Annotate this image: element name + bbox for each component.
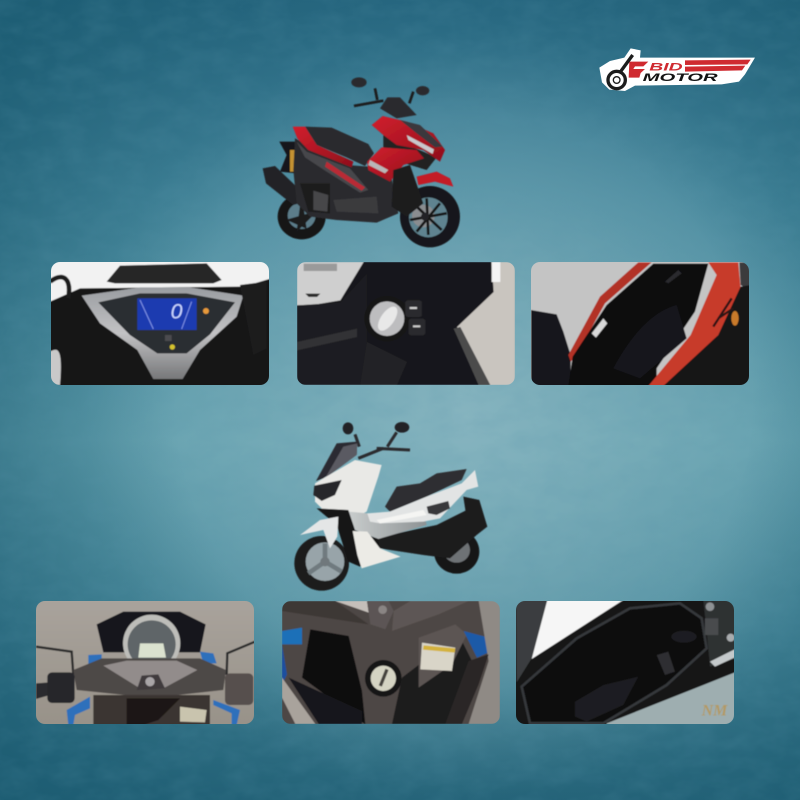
rear shock [279, 142, 303, 173]
photo: red scooter key ignition [297, 262, 515, 385]
logo sticker outline [599, 48, 755, 91]
red tail [293, 127, 353, 167]
seat [385, 469, 467, 512]
photo: white scooter handlebar dash [35, 600, 257, 725]
silver mid panel [348, 512, 427, 539]
front fender [417, 172, 453, 187]
rear wheel [434, 530, 479, 574]
headlight [313, 480, 342, 501]
photo: white scooter ignition and pocket [282, 601, 500, 724]
engine and dark lower body [373, 508, 487, 558]
scooter: red sport model [263, 77, 460, 247]
front wheel [400, 186, 460, 247]
white body side [367, 470, 478, 523]
red leg shield [367, 147, 424, 182]
front fork [392, 165, 423, 217]
scooter: white maxi model [294, 422, 487, 591]
photo: white scooter under-seat storage: NM [701, 703, 728, 720]
rear wheel [278, 194, 326, 239]
fork and dark center [317, 508, 380, 567]
photo: red scooter instrument panel: 0 [171, 299, 183, 323]
photo: red scooter instrument panel [50, 261, 272, 386]
white front fairing [315, 460, 382, 518]
handlebar and mirrors [351, 77, 429, 106]
front fender [300, 517, 338, 548]
logo: Bid Motor [599, 48, 755, 91]
dark body silhouette [293, 138, 398, 223]
logo red stripes [629, 60, 751, 78]
photo: red scooter under-seat storage [530, 261, 752, 386]
front wheel [294, 536, 349, 591]
front fairing [372, 116, 445, 162]
fairing dark stripes [400, 120, 443, 147]
mirrors and handlebar [343, 422, 410, 458]
photo: white scooter under-seat storage [515, 600, 737, 725]
logo wordmark MOTOR: MOTOR [643, 72, 718, 84]
windscreen [380, 97, 417, 118]
seat [305, 127, 374, 166]
engine [300, 183, 378, 213]
white leg shield [353, 531, 401, 568]
mid grey side panel [297, 142, 368, 193]
nose filler [383, 135, 437, 170]
logo wordmark BID: BID [649, 61, 683, 73]
logo motorcycle wheel [608, 55, 633, 89]
muffler [263, 166, 305, 205]
windscreen [316, 442, 357, 481]
